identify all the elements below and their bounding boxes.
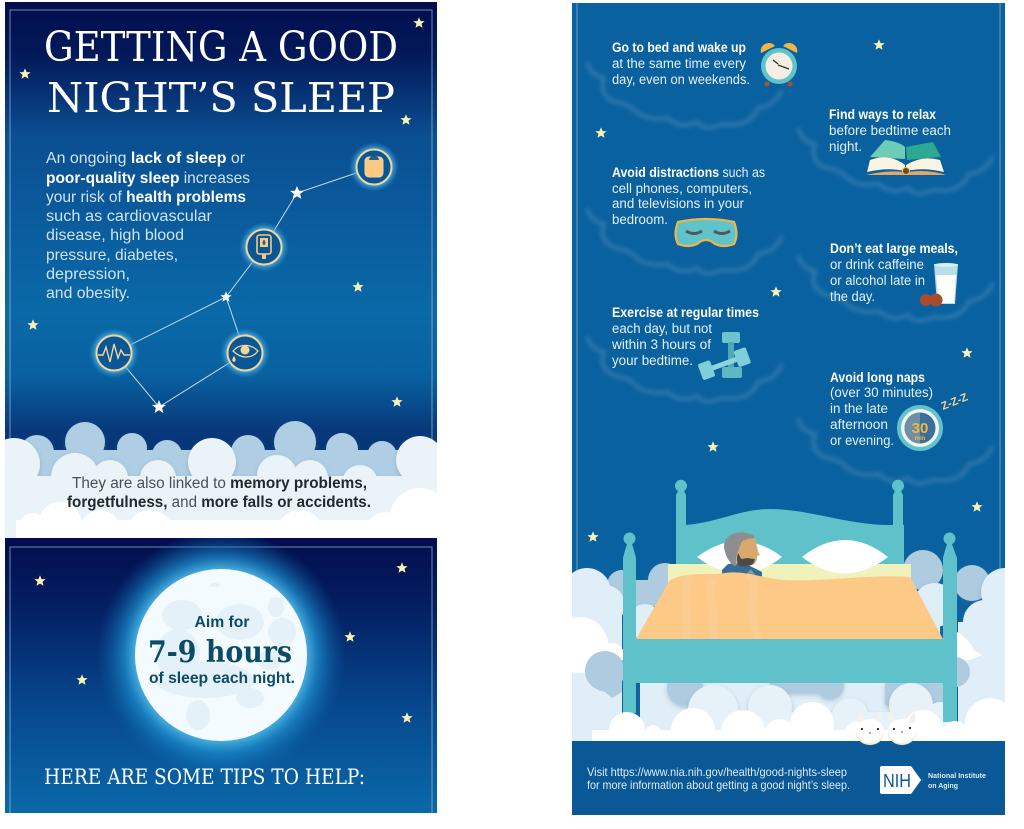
icon: dumbbells xyxy=(697,332,751,380)
icon: 30 minute timer: 30 xyxy=(912,420,928,437)
text: sleep hours goal xyxy=(148,614,295,687)
constellation lines and stars xyxy=(126,172,356,413)
tip: exercise: within 3 hours of xyxy=(611,337,711,352)
icon: heartbeat line xyxy=(90,330,138,376)
tip: naps: Avoid long naps xyxy=(830,370,925,385)
title: GETTING A GOOD xyxy=(44,23,398,71)
tip: relax: Find ways to relax xyxy=(829,107,936,122)
cloud outlines behind tips xyxy=(587,62,993,484)
title: NIGHT’S SLEEP xyxy=(47,74,395,122)
panel: top left health risks xyxy=(0,2,450,558)
blanket xyxy=(636,572,943,639)
logo: NIH: National Institute xyxy=(928,771,986,780)
tip: relax xyxy=(829,107,951,154)
text block: memory problems xyxy=(67,475,371,511)
tip: relax: before bedtime each xyxy=(829,123,951,138)
text block: health risk explanation: your risk of health problems xyxy=(46,189,246,206)
tip: exercise: Exercise at regular times xyxy=(612,305,759,320)
pale cloud mass xyxy=(572,568,1005,741)
illustration: bed and sleeper xyxy=(623,480,957,722)
tip: avoid distractions: Avoid distractions such as xyxy=(612,165,765,180)
clouds: top left panel xyxy=(5,421,437,538)
tip: consistent schedule xyxy=(612,40,750,87)
pillows xyxy=(697,543,782,570)
text block: health risk explanation: poor-quality sleep increases xyxy=(46,170,250,187)
text block: memory problems: They are also linked to memory problems, xyxy=(72,475,367,492)
title xyxy=(46,30,396,112)
tip: food and drink: or drink caffeine xyxy=(830,257,924,272)
stars: top left panel xyxy=(19,17,425,407)
tip: consistent schedule: day, even on weekends. xyxy=(612,72,750,87)
icon: alarm clock xyxy=(761,43,797,86)
footer xyxy=(572,741,1005,815)
footboard and posts xyxy=(623,639,957,683)
icon: z-z-z: Z-Z-Z xyxy=(940,391,970,413)
tip: food and drink xyxy=(830,241,958,304)
tip: naps xyxy=(830,370,933,448)
icon: glucose meter xyxy=(240,224,288,270)
panel: sleep tips and bed xyxy=(552,3,1024,754)
text block: health risk explanation: disease, high blood xyxy=(46,227,184,244)
text block: health risk explanation: An ongoing lack of sleep or xyxy=(46,150,246,167)
text block: health risk explanation: depression, xyxy=(46,266,130,283)
mattress sheet xyxy=(668,564,911,584)
icon: tearful eye xyxy=(222,330,268,376)
text: sleep hours goal: Aim for xyxy=(194,614,250,631)
heading: tips: HERE ARE SOME TIPS TO HELP: xyxy=(44,765,365,789)
text block: health risk explanation: and obesity. xyxy=(46,285,130,302)
text block: memory problems: forgetfulness, and more falls or accidents. xyxy=(67,494,371,511)
sleeper xyxy=(722,532,762,578)
text: sleep hours goal: of sleep each night. xyxy=(149,670,295,687)
icon: sleep mask xyxy=(676,219,736,246)
icon: bunny slippers xyxy=(856,712,917,745)
text: website link: for more information about getting a good night’s sleep. xyxy=(587,778,850,792)
clouds: bed background xyxy=(572,550,1005,741)
text: website link xyxy=(587,765,850,792)
tip: naps: in the late xyxy=(830,401,888,416)
icon: bathroom scale xyxy=(349,142,399,192)
tip: food and drink: Don’t eat large meals, xyxy=(830,241,958,256)
tip: exercise: each day, but not xyxy=(612,321,712,336)
logo: NIH xyxy=(880,766,986,794)
icon: open book xyxy=(866,140,946,175)
text: website link: Visit https://www.nia.nih.gov/health/good-nights-sleep xyxy=(587,765,847,779)
headboard xyxy=(676,509,904,565)
tip: exercise: your bedtime. xyxy=(612,353,693,368)
tip: avoid distractions: cell phones, computers, xyxy=(612,181,752,196)
moon xyxy=(102,538,340,768)
text block: health risk explanation xyxy=(46,150,250,302)
tip: avoid distractions xyxy=(612,165,765,227)
stars: tips panel xyxy=(587,39,983,542)
tip: consistent schedule: Go to bed and wake up xyxy=(612,40,746,55)
text block: health risk explanation: pressure, diabetes, xyxy=(46,247,178,264)
text block: health risk explanation: such as cardiovascular xyxy=(46,208,213,225)
text: sleep hours goal: 7-9 hours xyxy=(148,635,292,670)
tip: avoid distractions: bedroom. xyxy=(612,212,668,227)
icon: milk and cookies xyxy=(920,263,958,306)
tip: exercise xyxy=(611,305,759,368)
icon: 30 minute timer xyxy=(897,405,943,451)
stars: moon panel xyxy=(34,562,413,723)
logo: NIH: on Aging xyxy=(928,781,958,790)
logo: NIH: NIH xyxy=(883,771,911,791)
tip: food and drink: the day. xyxy=(830,289,875,304)
clouds: bed foreground xyxy=(592,698,1015,754)
panel: sleep duration moon xyxy=(5,530,437,813)
tip: consistent schedule: at the same time every xyxy=(612,56,746,71)
icon: 30 minute timer: min xyxy=(915,436,926,442)
tip: naps: afternoon xyxy=(830,417,888,432)
tip: naps: (over 30 minutes) xyxy=(830,385,933,400)
tip: relax: night. xyxy=(829,139,862,154)
tip: avoid distractions: and televisions in your xyxy=(612,196,744,211)
tip: food and drink: or alcohol late in xyxy=(830,273,925,288)
tip: naps: or evening. xyxy=(830,433,894,448)
